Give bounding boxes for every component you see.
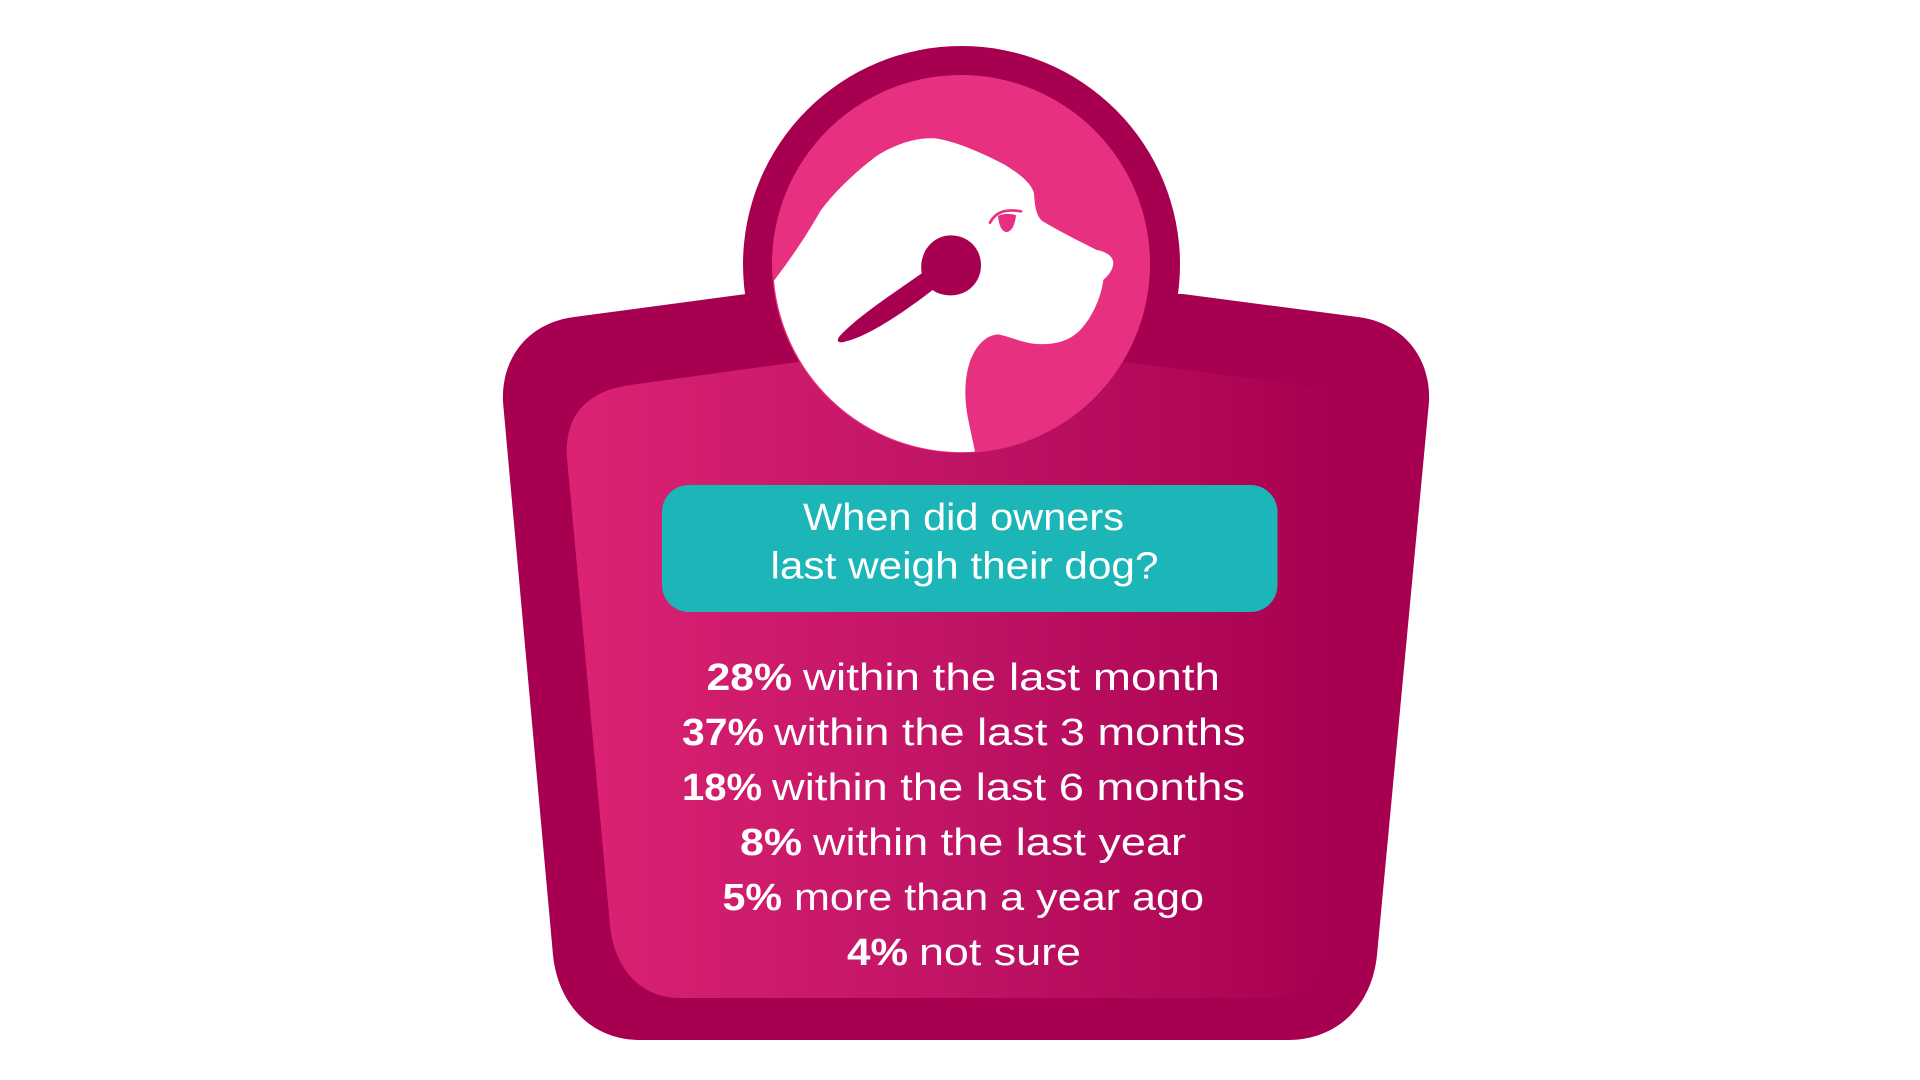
scale inner panel	[567, 362, 1372, 998]
eyebrow	[990, 210, 1021, 223]
dial inner disc	[772, 75, 1150, 453]
result: 28%: 28%	[706, 657, 792, 699]
needle	[838, 235, 981, 342]
panel: question banner	[662, 485, 1278, 612]
eye	[990, 210, 1021, 232]
result: 8%: within the last year	[812, 822, 1186, 864]
scale dial	[772, 75, 1150, 453]
result: 37%: 37%	[682, 712, 764, 754]
result: 18%: 18%	[682, 767, 762, 809]
result: 4%	[847, 932, 1081, 974]
result: 28%: within the last month	[802, 657, 1220, 699]
heading line 1: When did owners	[803, 497, 1124, 539]
result: 37%: within the last 3 months	[773, 712, 1246, 754]
result: 5%: 5%	[722, 877, 782, 919]
result: 4%: not sure	[919, 932, 1081, 974]
text block: survey results	[682, 657, 1246, 974]
pupil	[998, 214, 1016, 232]
result: 18%: within the last 6 months	[771, 767, 1245, 809]
heading line 2: last weigh their dog?	[770, 546, 1158, 588]
result: 5%: more than a year ago	[794, 877, 1204, 919]
banner background	[662, 485, 1278, 612]
result: 8%: 8%	[740, 822, 802, 864]
result: 28%	[706, 657, 1220, 699]
panel: scale body	[503, 46, 1429, 1040]
scale outer body	[503, 294, 1429, 1040]
dog silhouette	[774, 138, 1113, 452]
icon: dog head with scale needle	[774, 138, 1113, 452]
result: 4%: 4%	[847, 932, 908, 974]
dial outer ring	[743, 46, 1180, 483]
